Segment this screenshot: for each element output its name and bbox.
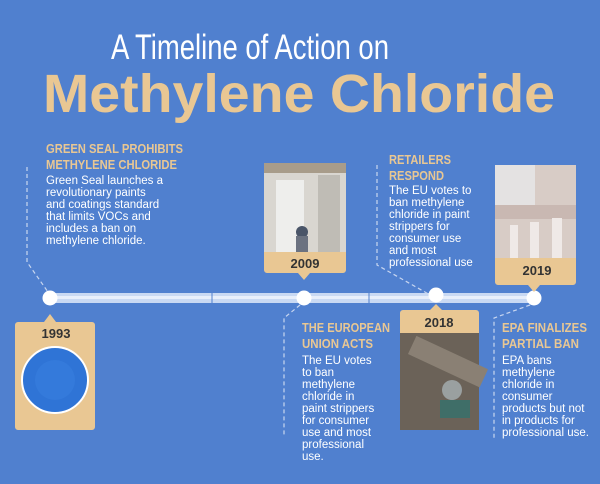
text: green seal — [46, 142, 183, 247]
card 2018 — [400, 304, 488, 430]
text: epa: in products for — [502, 415, 575, 427]
text: european union: THE EUROPEAN — [302, 321, 390, 335]
text: retailers respond: strippers for — [389, 221, 450, 233]
text: epa: professional use. — [502, 427, 589, 439]
text: retailers respond — [389, 153, 473, 269]
text: european union: for consumer — [302, 415, 369, 427]
card 2009: 2009 — [291, 256, 319, 271]
text: european union: use and most — [302, 427, 372, 439]
text: european union: use. — [302, 451, 324, 463]
text: european union: methylene — [302, 379, 355, 391]
text: retailers respond: consumer use — [389, 233, 461, 245]
text: green seal: GREEN SEAL PROHIBITS — [46, 142, 183, 156]
dashed connectors — [27, 165, 530, 440]
text: retailers respond: ban methylene — [389, 197, 464, 209]
text: green seal: includes a ban on — [46, 223, 136, 235]
title — [43, 28, 555, 124]
card 1993: 1993 — [42, 326, 70, 341]
text: european union: The EU votes — [302, 355, 372, 367]
text: retailers respond: RESPOND — [389, 169, 444, 183]
text: european union: to ban — [302, 367, 334, 379]
text: green seal: Green Seal launches a — [46, 175, 164, 187]
card 2019 — [495, 165, 576, 292]
text: green seal: methylene chloride. — [46, 235, 146, 247]
text: green seal: revolutionary paints — [46, 187, 146, 199]
title: A Timeline of Action on — [111, 28, 389, 67]
text: european union — [302, 321, 390, 463]
card 1993 — [15, 314, 95, 430]
text: epa: consumer — [502, 391, 553, 403]
title: Methylene Chloride — [43, 64, 555, 124]
text: retailers respond: and most — [389, 245, 437, 257]
text: epa: chloride in — [502, 379, 554, 391]
text: retailers respond: The EU votes to — [389, 185, 471, 197]
text: epa: methylene — [502, 367, 555, 379]
text: green seal: and coatings standard — [46, 199, 159, 211]
text: retailers respond: chloride in paint — [389, 209, 470, 221]
text: epa: PARTIAL BAN — [502, 337, 579, 351]
timeline — [42, 288, 542, 306]
text: epa: products but not — [502, 403, 585, 415]
text: green seal: METHYLENE CHLORIDE — [46, 158, 177, 172]
text: european union: professional — [302, 439, 364, 451]
text: epa: EPA FINALIZES — [502, 321, 587, 335]
text: green seal: that limits VOCs and — [46, 211, 151, 223]
text: retailers respond: RETAILERS — [389, 153, 451, 167]
card 2018: 2018 — [425, 315, 453, 330]
text: european union: chloride in — [302, 391, 354, 403]
text: european union: UNION ACTS — [302, 337, 373, 351]
card 2009 — [264, 163, 346, 280]
text: epa — [502, 321, 589, 439]
text: european union: paint strippers — [302, 403, 374, 415]
card 2019: 2019 — [523, 263, 551, 278]
text: retailers respond: professional use — [389, 257, 473, 269]
text: epa: EPA bans — [502, 355, 552, 367]
